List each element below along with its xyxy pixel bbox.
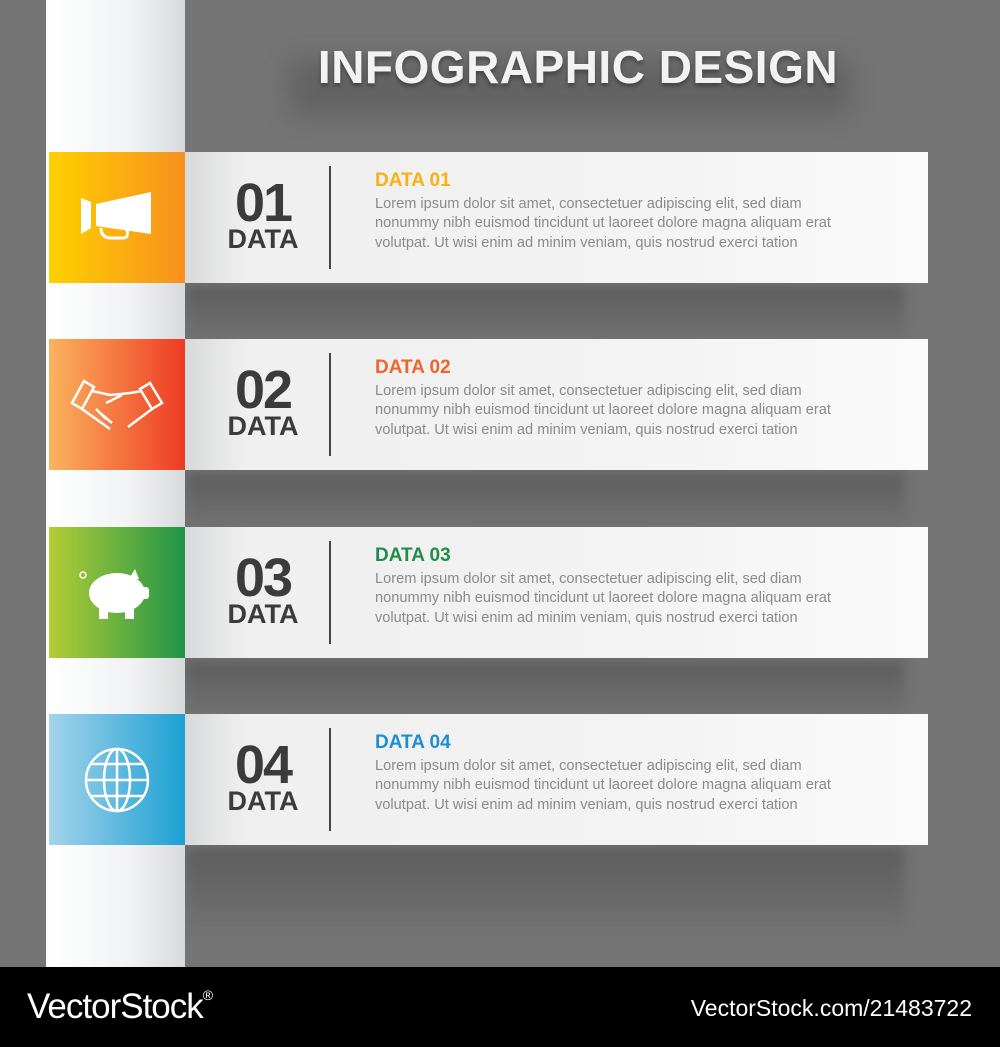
panel 3: nonummy nibh euismod tincidunt ut laoreet dolore magna aliquam erat: [375, 590, 831, 606]
shadow under row 3: [185, 660, 905, 720]
icon box 2: [49, 339, 185, 470]
shadow under row 2: [185, 472, 905, 532]
panel 3: [185, 527, 928, 658]
page shadow band: [290, 60, 850, 115]
panel 2: nonummy nibh euismod tincidunt ut laoreet dolore magna aliquam erat: [375, 402, 831, 418]
icon: piggy bank: [79, 569, 149, 619]
panel 2: DATA: [228, 411, 298, 441]
panel 3: DATA 03: [375, 545, 451, 566]
panel 4: nonummy nibh euismod tincidunt ut laoreet dolore magna aliquam erat: [375, 777, 831, 793]
shadow under row 1: [185, 285, 905, 345]
panel 1: Lorem ipsum dolor sit amet, consectetuer adipiscing elit, sed diam: [375, 196, 802, 212]
icon box 1: [49, 152, 185, 283]
panel 2: [185, 339, 928, 470]
panel 1: [185, 152, 928, 283]
footer logo: VectorStock®: [27, 987, 212, 1026]
panel 1: volutpat. Ut wisi enim ad minim veniam, quis nostrud exerci tation: [375, 235, 798, 251]
panel 2: Lorem ipsum dolor sit amet, consectetuer adipiscing elit, sed diam: [375, 383, 802, 399]
panel 1: DATA: [228, 224, 298, 254]
icon: megaphone: [81, 192, 151, 240]
icon box 3: [49, 527, 185, 658]
panel 2: 02: [235, 360, 291, 420]
icon box 4: [49, 714, 185, 845]
icon: globe: [84, 748, 150, 812]
panel 4: DATA 04: [375, 732, 451, 753]
panel 2: volutpat. Ut wisi enim ad minim veniam, quis nostrud exerci tation: [375, 422, 798, 438]
panel 4: Lorem ipsum dolor sit amet, consectetuer adipiscing elit, sed diam: [375, 758, 802, 774]
panel 3: volutpat. Ut wisi enim ad minim veniam, quis nostrud exerci tation: [375, 610, 798, 626]
shadow under row 4: [185, 847, 905, 937]
panel 4: DATA: [228, 786, 298, 816]
panel 3: 03: [235, 548, 291, 608]
vertical column: [46, 0, 185, 967]
panel 4: volutpat. Ut wisi enim ad minim veniam, quis nostrud exerci tation: [375, 797, 798, 813]
footer url: VectorStock.com/21483722: [691, 995, 972, 1021]
footer bar: [0, 967, 1000, 1047]
panel 1: nonummy nibh euismod tincidunt ut laoreet dolore magna aliquam erat: [375, 215, 831, 231]
panel 4: [185, 714, 928, 845]
panel 3: Lorem ipsum dolor sit amet, consectetuer adipiscing elit, sed diam: [375, 571, 802, 587]
panel 4: 04: [235, 735, 291, 795]
panel 2: DATA 02: [375, 357, 451, 378]
panel 1: DATA 01: [375, 170, 451, 191]
title: INFOGRAPHIC DESIGN: [318, 41, 838, 93]
panel 3: DATA: [228, 599, 298, 629]
panel 1: 01: [235, 173, 291, 233]
icon: handshake: [70, 379, 164, 430]
